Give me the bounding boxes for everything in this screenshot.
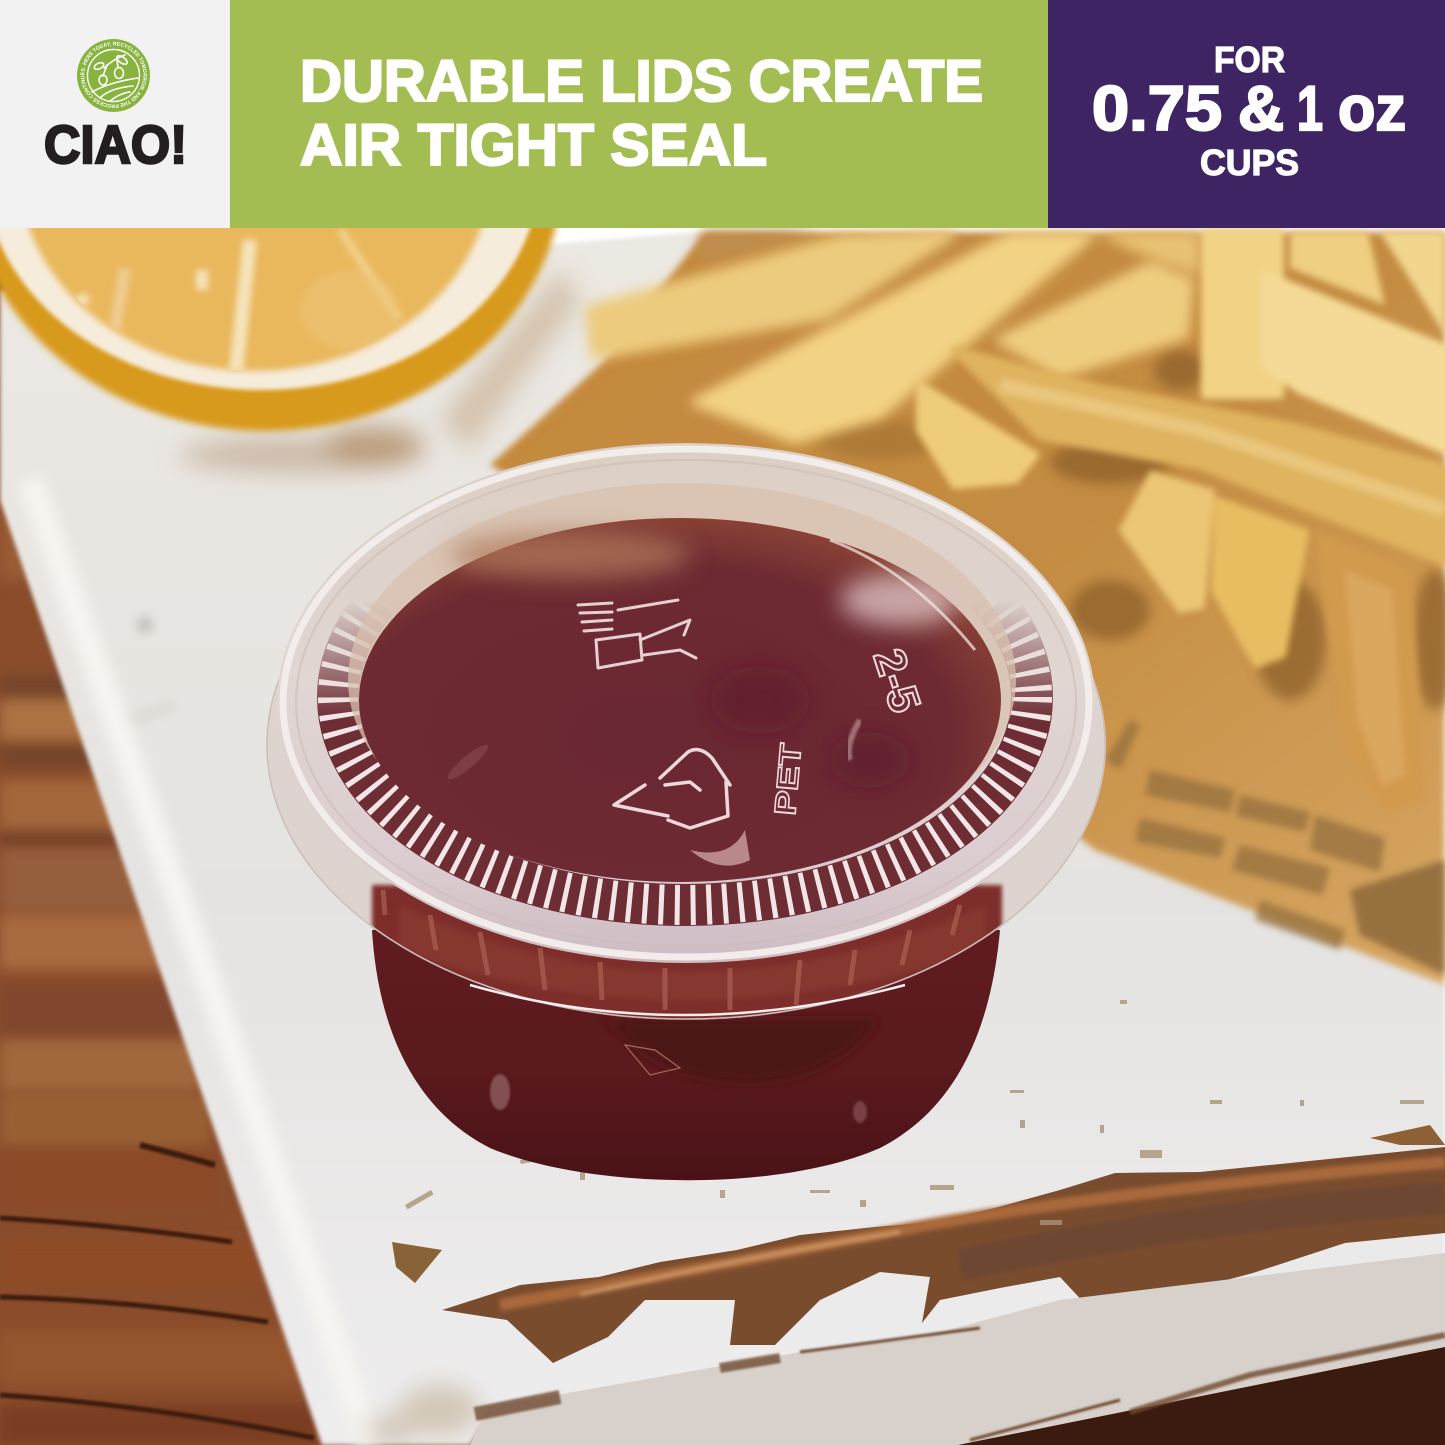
- corner mottling: [366, 1384, 480, 1445]
- chipped paint on the board: [392, 1125, 1445, 1363]
- paper under the fries: [490, 232, 1445, 985]
- badge: CUPS: CUPS: [1200, 142, 1299, 183]
- lid rim highlights: [283, 449, 1089, 957]
- badge: FOR: FOR: [1214, 39, 1285, 80]
- sauce swirls and glare: [444, 531, 975, 866]
- printed paper text, blurred: [1105, 720, 1445, 975]
- lemon shadow on the board: [180, 270, 580, 473]
- size badge: [1048, 0, 1445, 228]
- dark wood under the board, bottom right: [958, 1347, 1445, 1445]
- board: paint speckles: [405, 1000, 1424, 1225]
- lid flange: [266, 676, 1106, 1020]
- title line 2: AIR TIGHT SEAL: [300, 113, 767, 178]
- badge: sizes: &: [1238, 74, 1284, 144]
- embossed mark: size code: 2-5: [863, 643, 930, 719]
- sauce seen through the lid: [359, 518, 1001, 882]
- board: left edge highlights: [30, 480, 370, 1445]
- board: front face: [470, 1253, 1445, 1445]
- brand name: CIAO!: [44, 115, 187, 175]
- badge: sizes: oz: [1338, 74, 1406, 144]
- french fries: [590, 232, 1445, 810]
- board: front face scuffs: [475, 1328, 1445, 1440]
- embossed mark: PET: PET: [769, 742, 808, 817]
- logo panel: [0, 0, 230, 228]
- title band: [230, 0, 1048, 228]
- badge: sizes: 1: [1297, 74, 1323, 144]
- inner well of the lid: [348, 483, 1016, 791]
- embossed mark: recycle triangle: [614, 750, 730, 828]
- shadow patches on the paper: [820, 350, 1445, 710]
- wood table: [0, 228, 500, 1445]
- ribbed seal ring: [317, 606, 1053, 926]
- icon: round olive logo: HERE TODAY, RECYCLED TOMORROW, AND THE PROCESS CONTINUES.: [80, 42, 147, 108]
- lemon slice: [0, 228, 562, 436]
- badge: sizes: 0.75: [1092, 74, 1222, 144]
- title line 1: DURABLE LIDS CREATE: [300, 49, 983, 114]
- embossed mark: top: [578, 600, 696, 668]
- lid top plate: [277, 443, 1095, 963]
- cup body filled with sauce: [372, 930, 1000, 1180]
